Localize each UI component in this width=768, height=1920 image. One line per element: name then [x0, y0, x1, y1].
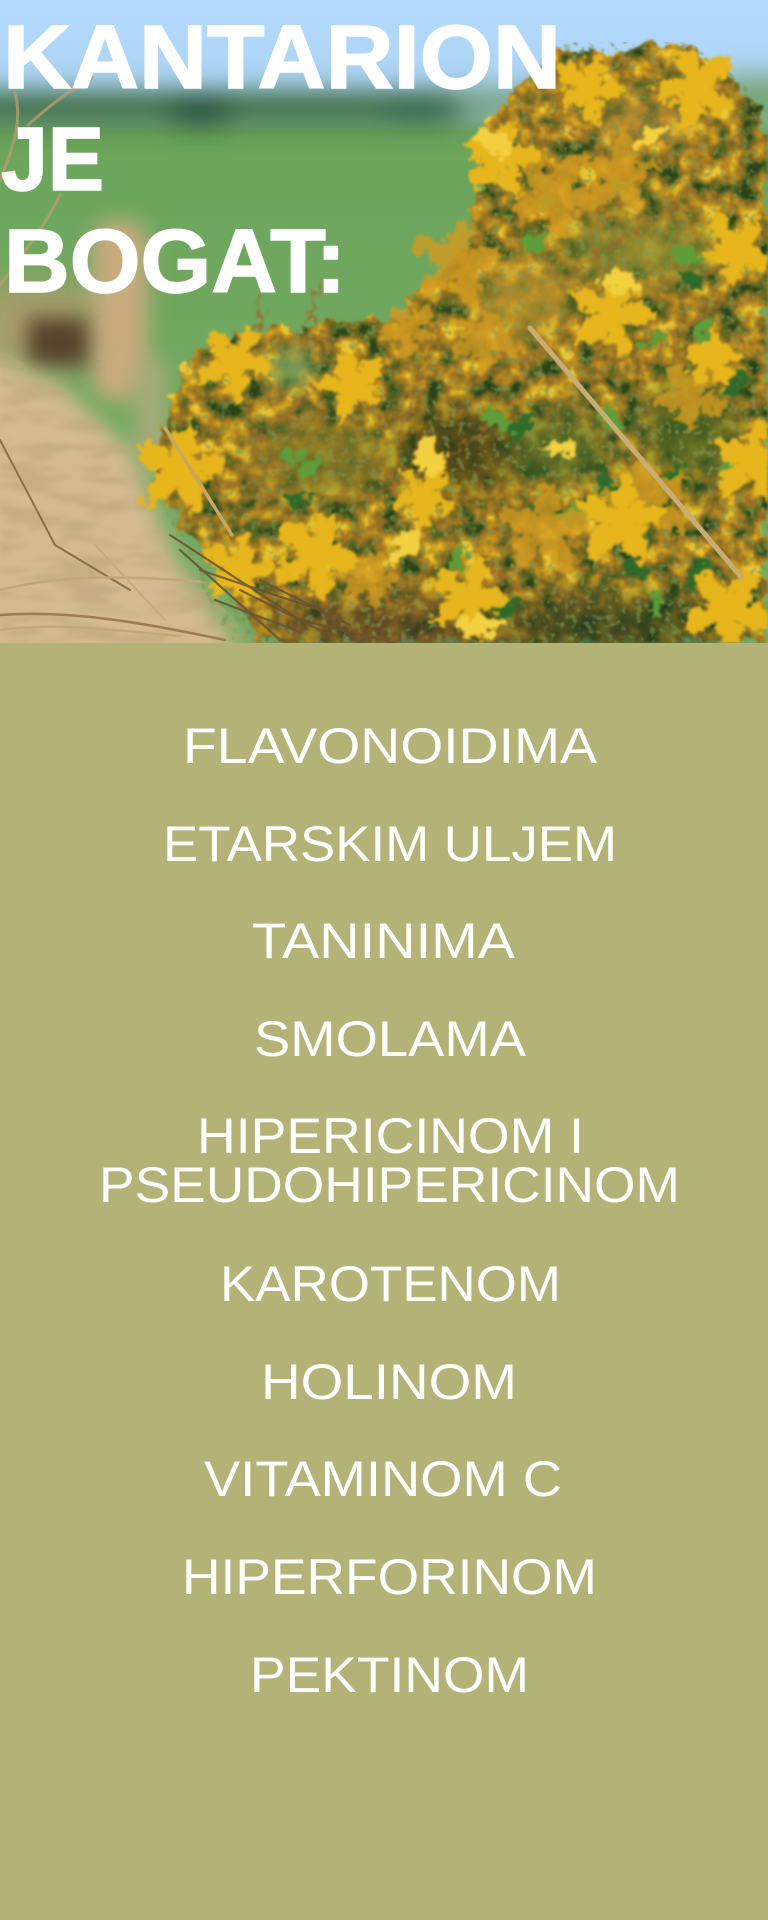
bush body with mottled foliage colours	[150, 46, 768, 643]
title: JE	[1, 110, 104, 210]
green leaves	[279, 176, 751, 621]
title	[1, 8, 561, 310]
list item: hipericinom i pseudohipericinom	[99, 1109, 680, 1209]
field showing through the sparse left lobe	[270, 350, 314, 386]
photo background: distant tree line	[0, 76, 768, 126]
yellow flowers	[122, 26, 768, 675]
brown twig bundle at the bush base	[170, 535, 395, 643]
flowering bush	[134, 38, 768, 643]
twigs and stems	[190, 120, 720, 600]
panel: list of compounds	[0, 643, 768, 1920]
thin twigs over the meadow at top left	[0, 78, 92, 285]
pale straw stalks across the bush	[165, 328, 742, 578]
bush shadow and foliage patches	[250, 100, 740, 651]
panel: hero photo of St John's wort flowers	[0, 0, 768, 643]
bush texture speckle	[162, 42, 768, 643]
list item: hipericinom i pseudohipericinom: HIPERICINOM I	[197, 1109, 584, 1164]
photo background: blurred tan hay bale	[0, 220, 165, 470]
photo background: sky	[0, 0, 768, 130]
title: KANTARION	[3, 8, 561, 108]
photo background: dry straw ground	[0, 348, 254, 643]
title: BOGAT:	[4, 212, 346, 310]
photo background: meadow	[0, 118, 768, 718]
